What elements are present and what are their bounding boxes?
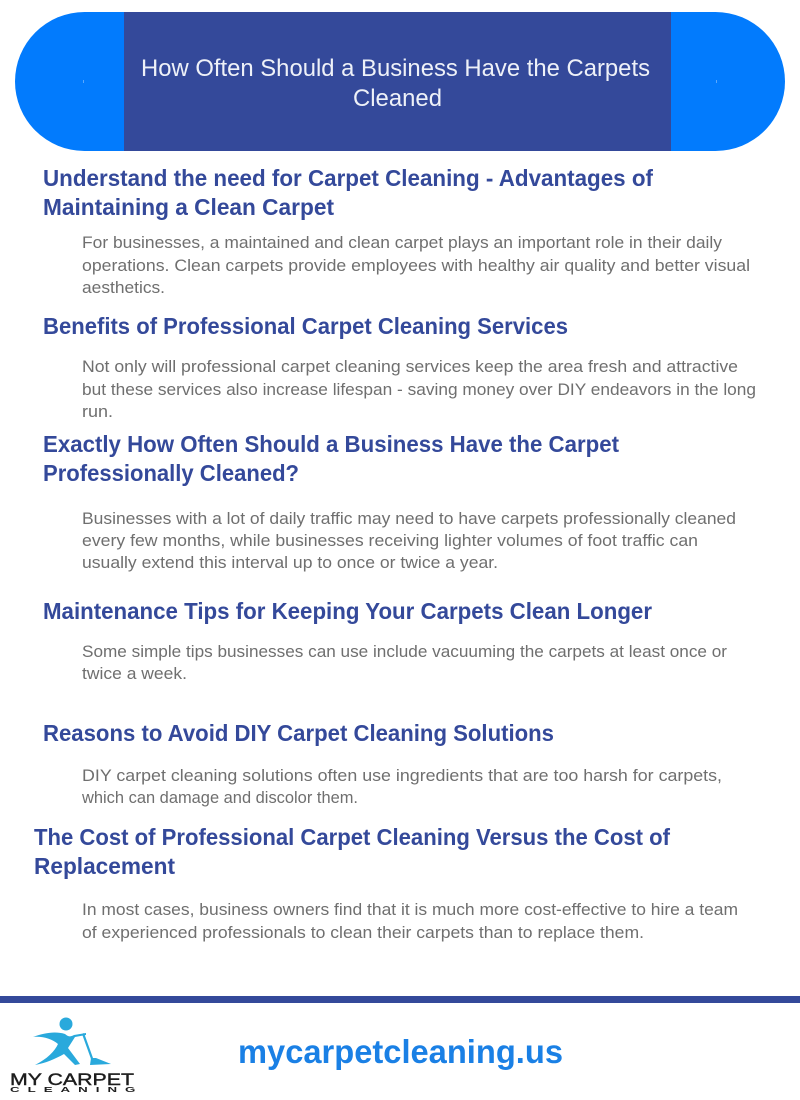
heading: Understand the need for Carpet Cleaning - Advantages of [43, 165, 653, 191]
section: how often [43, 431, 736, 572]
text block [82, 358, 756, 421]
section: cost [34, 824, 738, 942]
heading [43, 431, 619, 486]
section: need for carpet cleaning [43, 165, 750, 297]
heading [43, 165, 653, 220]
text block: Businesses with a lot of daily traffic may need to have carpets professionally cleaned [82, 510, 736, 528]
icon: person with vacuum [33, 1018, 111, 1065]
text block: usually extend this interval up to once or twice a year. [82, 554, 498, 572]
heading: Maintenance Tips for Keeping Your Carpets Clean Longer [43, 598, 652, 624]
text block: Some simple tips businesses can use include vacuuming the carpets at least once or [82, 643, 728, 661]
header banner [15, 12, 785, 151]
title: How Often Should a Business Have the Carpets [141, 55, 650, 82]
title: Cleaned [353, 85, 442, 112]
text block: For businesses, a maintained and clean carpet plays an important role in their daily [82, 234, 723, 252]
text block: operations. Clean carpets provide employees with healthy air quality and better visual [82, 257, 750, 275]
logo wordmark [10, 1070, 135, 1094]
heading: Exactly How Often Should a Business Have the Carpet [43, 431, 619, 457]
text block: twice a week. [82, 665, 187, 683]
title [141, 55, 650, 112]
footer bar [0, 996, 800, 1003]
logo wordmark: MY CARPET [10, 1070, 134, 1089]
heading: Maintaining a Clean Carpet [43, 194, 334, 220]
heading [34, 824, 670, 879]
text block: DIY carpet cleaning solutions often use ingredients that are too harsh for carpets, [82, 767, 722, 785]
heading: Reasons to Avoid DIY Carpet Cleaning Solutions [43, 720, 554, 746]
section: benefits [43, 313, 756, 421]
text block [82, 643, 728, 683]
logo [10, 1018, 135, 1094]
text block: of experienced professionals to clean their carpets than to replace them. [82, 924, 644, 942]
text block: Not only will professional carpet cleaning services keep the area fresh and attractive [82, 358, 738, 376]
text block: which can damage and discolor them. [81, 789, 358, 807]
heading: Benefits of Professional Carpet Cleaning Services [43, 313, 568, 339]
text block: every few months, while businesses receiving lighter volumes of foot traffic can [82, 532, 698, 550]
text block [82, 510, 736, 572]
logo wordmark: CLEANING [10, 1086, 135, 1094]
heading: Replacement [34, 853, 175, 879]
text block [81, 767, 722, 807]
section: maintenance tips [43, 598, 728, 683]
text block: aesthetics. [82, 279, 165, 297]
heading: The Cost of Professional Carpet Cleaning Versus the Cost of [34, 824, 670, 850]
website url: mycarpetcleaning.us [238, 1033, 563, 1070]
text block: In most cases, business owners find that it is much more cost-effective to hire a team [82, 901, 738, 919]
text block: run. [82, 403, 113, 421]
text block [82, 901, 738, 942]
heading: Professionally Cleaned? [43, 460, 299, 486]
text block [82, 234, 750, 297]
section: avoid DIY [43, 720, 722, 807]
text block: but these services also increase lifespan - saving money over DIY endeavors in the long [82, 381, 756, 399]
